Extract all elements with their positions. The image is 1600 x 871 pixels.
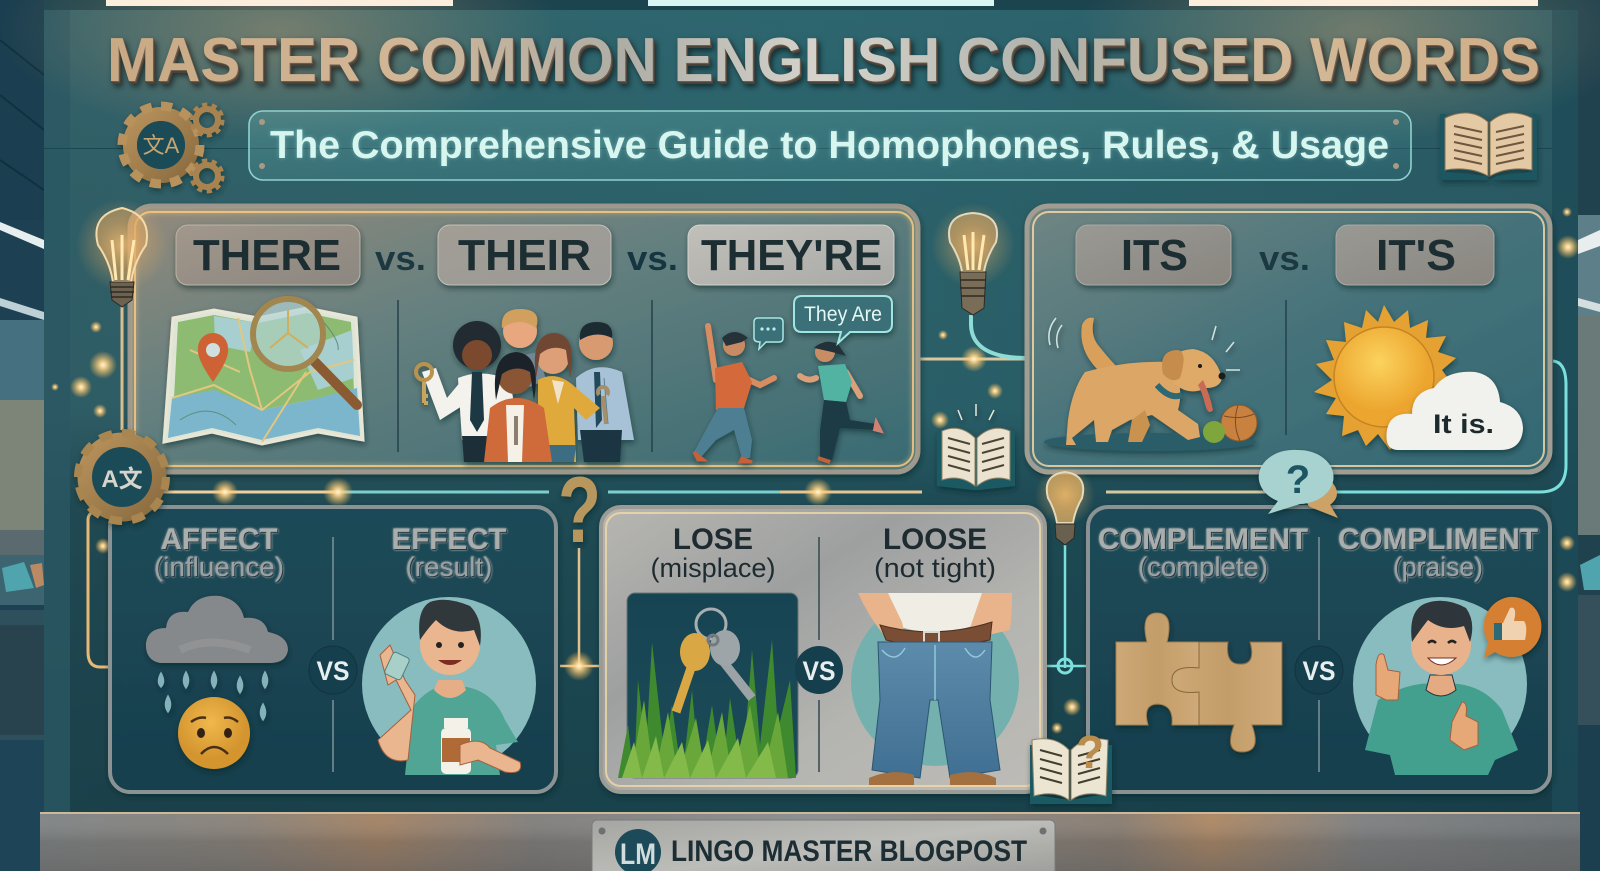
caption: result: (result) xyxy=(406,552,492,582)
thumb speech bubble xyxy=(1484,597,1541,658)
icon: left light bulb xyxy=(76,199,168,307)
ceiling lights xyxy=(106,0,1538,6)
subtitle glass panel xyxy=(249,111,1411,180)
heading: complement: COMPLEMENT xyxy=(1098,523,1308,556)
illustration: two people running with speech bubbles xyxy=(694,296,892,462)
heading: affect: AFFECT xyxy=(160,523,278,556)
illustration: rain cloud xyxy=(146,596,288,720)
illustration: group of people with keys xyxy=(416,309,634,462)
icon: open book middle xyxy=(937,404,1015,490)
speech bubble: they are: They Are xyxy=(804,303,882,326)
pill: it's xyxy=(1336,225,1494,285)
panel: lose loose xyxy=(601,507,1045,792)
panel: there their they're xyxy=(130,206,918,472)
woman in orange xyxy=(484,352,552,462)
illustration: man giving thumbs up xyxy=(1353,597,1541,775)
background: left office corridor xyxy=(0,0,46,871)
pill: they're: THEY'RE xyxy=(701,231,882,280)
right runner xyxy=(800,342,882,462)
icon: open book top right xyxy=(1440,113,1537,181)
icon: lower light bulb xyxy=(1035,465,1095,545)
speech bubble: they are xyxy=(794,296,892,343)
pill: there: THERE xyxy=(193,231,341,280)
caption: influence: (influence) xyxy=(154,552,284,582)
pill: their: THEIR xyxy=(458,231,591,280)
left runner xyxy=(694,326,774,462)
blond man xyxy=(502,309,546,395)
icon: center light bulb xyxy=(931,203,1015,315)
icon: open book with question mark: ? xyxy=(1076,726,1104,778)
vs separator one: vs. xyxy=(375,240,426,278)
map pin xyxy=(198,333,228,382)
icon: lower left gear: A文 xyxy=(101,465,143,493)
woman in yellow xyxy=(535,333,608,462)
icon: translation gears: 文A xyxy=(143,133,180,158)
pill: its xyxy=(1076,225,1231,285)
small speech bubble xyxy=(754,318,783,349)
background: right office corridor xyxy=(1578,0,1600,871)
man on right xyxy=(576,322,634,462)
key left xyxy=(424,378,428,403)
illustration: sun xyxy=(1314,305,1456,450)
icon: vs badge xyxy=(1295,646,1343,694)
man with afro xyxy=(416,321,520,462)
caption: misplace: (misplace) xyxy=(650,553,776,583)
pill: it's: IT'S xyxy=(1376,231,1456,280)
caption: praise: (praise) xyxy=(1393,552,1483,582)
keys right xyxy=(598,387,608,424)
icon: question speech bubbles: ? xyxy=(1286,458,1310,502)
icon: translation gears xyxy=(122,105,222,191)
caption: not tight: (not tight) xyxy=(874,553,996,583)
illustration: puzzle pieces xyxy=(1116,613,1282,752)
connectors and sparks xyxy=(51,207,1580,734)
heading: lose: LOSE xyxy=(673,523,753,556)
keys xyxy=(676,609,752,712)
panel: its it's xyxy=(1027,206,1550,472)
icon: open book with question mark xyxy=(1030,726,1112,804)
illustration: keys lost in grass xyxy=(618,593,798,778)
panel: complement compliment xyxy=(1088,507,1550,792)
heading: loose: LOOSE xyxy=(883,523,987,556)
icon: vs badge: VS xyxy=(316,656,350,686)
icon: vs badge xyxy=(309,646,357,694)
illustration: cloud with text it is: It is. xyxy=(1433,409,1494,439)
title: MASTER COMMON ENGLISH CONFUSED WORDS xyxy=(107,26,1540,95)
illustration: map with pin and magnifier xyxy=(164,299,363,444)
caption: complete: (complete) xyxy=(1138,552,1268,582)
illustration: cloud with text it is xyxy=(1386,372,1523,450)
illustration: dog playing with balls xyxy=(1044,318,1257,451)
icon: sad face xyxy=(178,697,250,769)
pill: its: ITS xyxy=(1121,231,1188,280)
grass xyxy=(618,640,796,778)
icon: vs badge xyxy=(795,646,843,694)
vs separator two: vs. xyxy=(627,240,678,278)
illustration: man with loose jeans xyxy=(851,593,1019,785)
icon: vs badge: VS xyxy=(1302,656,1336,686)
icon: question speech bubbles xyxy=(1259,450,1338,518)
heading: compliment: COMPLIMENT xyxy=(1338,523,1538,556)
logo: lm monogram: LM xyxy=(620,838,656,871)
subtitle: The Comprehensive Guide to Homophones, Rules, & Usage xyxy=(270,124,1389,167)
vs separator: vs. xyxy=(1259,240,1310,278)
pill: there xyxy=(176,225,360,285)
footer brand plate xyxy=(592,820,1055,871)
icon: lower left gear xyxy=(78,433,166,521)
icon: question mark: ? xyxy=(558,457,601,562)
thumbs xyxy=(1376,654,1400,700)
brand name: LINGO MASTER BLOGPOST xyxy=(671,835,1027,868)
illustration: man with medicine xyxy=(362,597,536,775)
icon: vs badge: VS xyxy=(802,656,836,686)
logo: lm monogram xyxy=(615,829,661,871)
footer metal band xyxy=(40,812,1580,871)
pill: their xyxy=(438,225,611,285)
magnifier xyxy=(315,362,357,405)
heading: effect: EFFECT xyxy=(392,523,506,556)
panel: affect effect xyxy=(110,507,556,792)
